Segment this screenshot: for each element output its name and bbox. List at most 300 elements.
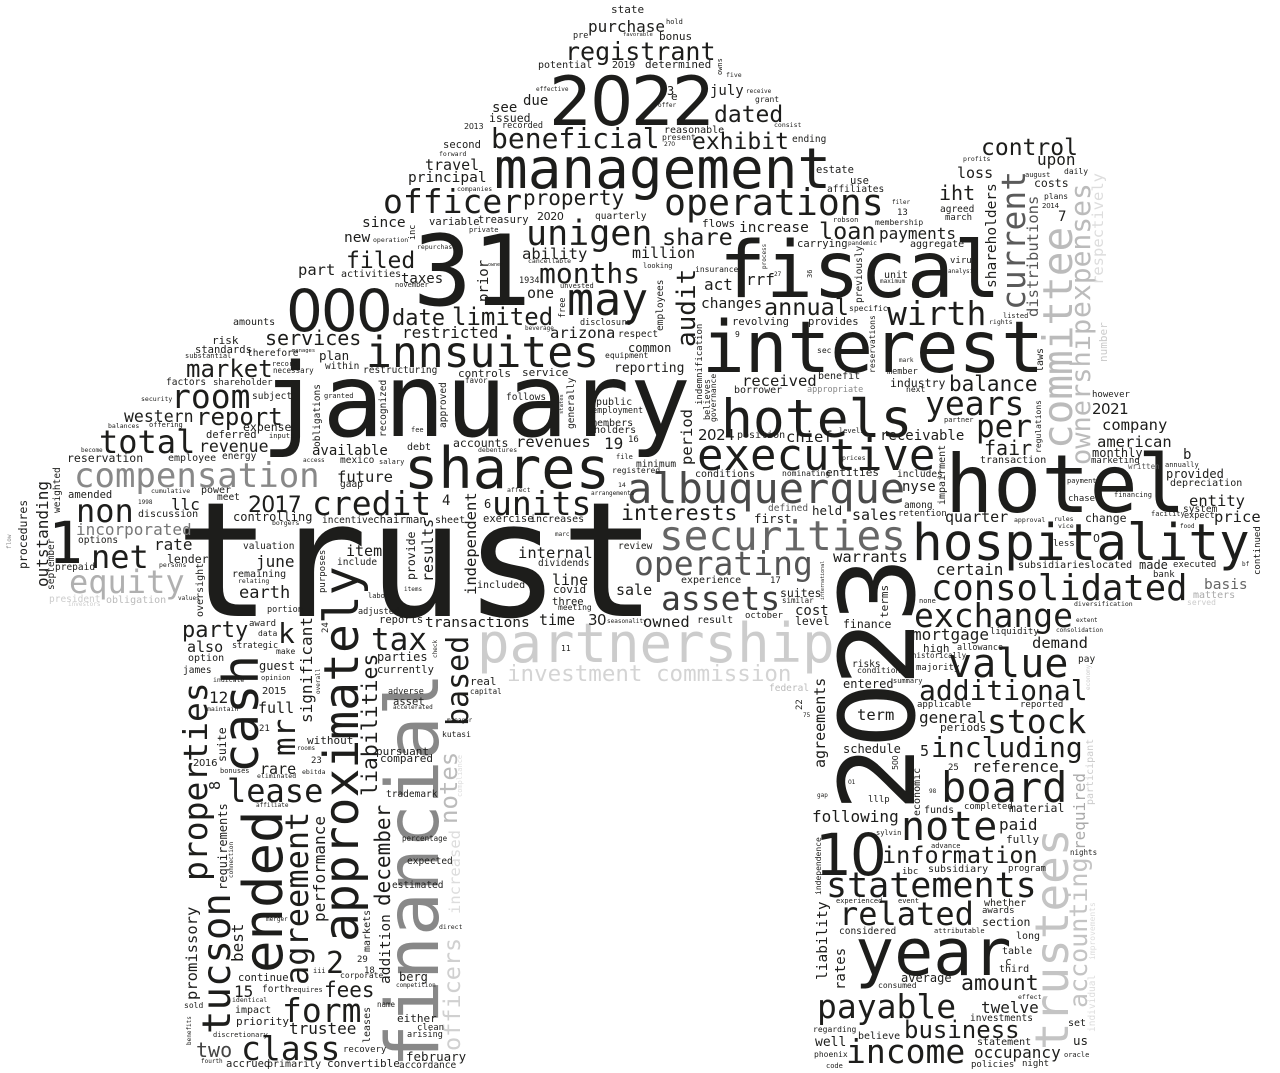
small horizontal words: access (303, 457, 325, 464)
vertical words: increased (446, 830, 464, 914)
small horizontal words: payment (1067, 477, 1097, 485)
medium horizontal words: 2021 (1092, 400, 1128, 418)
medium horizontal words: see (492, 100, 517, 116)
medium horizontal words: rate (154, 535, 193, 554)
small horizontal words: listed (1003, 312, 1028, 320)
small horizontal words: members (591, 418, 633, 429)
vertical words: current (994, 171, 1033, 310)
small horizontal words: energy (222, 451, 257, 462)
small horizontal words: expected (407, 856, 453, 867)
small horizontal words: table (1002, 946, 1032, 957)
small horizontal words: options (78, 535, 118, 546)
small horizontal words: respect (618, 329, 658, 340)
vertical words: suite (215, 727, 229, 762)
small horizontal words: dividends (538, 558, 589, 569)
small horizontal words: marc (555, 531, 570, 538)
vertical words: oversight (195, 563, 206, 617)
small horizontal words: employee (168, 453, 216, 464)
medium horizontal words: tax (371, 622, 427, 658)
small horizontal words: manager (447, 717, 473, 724)
small horizontal words: 01 (848, 779, 856, 786)
vertical words: check (432, 640, 439, 658)
medium horizontal words: total (99, 423, 195, 461)
small horizontal words: currently (377, 664, 434, 676)
medium horizontal words: owned (643, 613, 690, 631)
medium horizontal words: item (346, 542, 382, 560)
small horizontal words: fourth (201, 1058, 223, 1065)
largest words: financial (371, 672, 456, 1068)
small horizontal words: food (1180, 523, 1195, 530)
small horizontal words: favor (465, 376, 488, 385)
small horizontal words: debt (407, 442, 431, 453)
small horizontal words: state (611, 3, 644, 16)
small horizontal words: owner (488, 262, 503, 268)
medium horizontal words: sale (616, 581, 652, 599)
small horizontal words: defined (768, 503, 808, 514)
small horizontal words: quarterly (595, 211, 647, 222)
vertical words: impairment (937, 445, 948, 505)
medium horizontal words: travel (425, 156, 479, 174)
small horizontal words: employment (592, 406, 643, 416)
small horizontal words: ebitda (302, 768, 326, 776)
small horizontal words: holders (594, 425, 636, 436)
medium horizontal words: balance (949, 372, 1038, 396)
medium horizontal words: act (704, 275, 733, 294)
small horizontal words: diversification (1074, 600, 1133, 608)
vertical words: liabilities (358, 654, 383, 796)
small horizontal words: result (697, 615, 733, 626)
small horizontal words: made (1139, 558, 1168, 572)
small horizontal words: cumulative (151, 487, 190, 495)
small horizontal words: issued (489, 111, 531, 125)
small horizontal words: offer (658, 102, 676, 109)
small horizontal words: data (258, 629, 277, 638)
small horizontal words: treasury (478, 214, 529, 226)
small horizontal words: 11 (561, 644, 571, 653)
small horizontal words: attributable (934, 927, 985, 935)
small horizontal words: labor (368, 592, 389, 600)
medium horizontal words: arizona (550, 324, 615, 342)
small horizontal words: estate (816, 164, 854, 176)
medium horizontal words: services (265, 326, 361, 350)
small horizontal words: relating (238, 577, 269, 585)
small horizontal words: 2013 (464, 122, 483, 131)
small horizontal words: corporate (340, 971, 384, 980)
small horizontal words: carrying (797, 238, 848, 250)
small horizontal words: none (919, 597, 936, 605)
small horizontal words: bonuses (220, 767, 250, 775)
medium horizontal words: fees (324, 978, 375, 1002)
vertical words: recognized (378, 380, 389, 437)
small horizontal words: incentive (322, 515, 374, 526)
small horizontal words: kutasi (442, 730, 471, 739)
small horizontal words: meeting (558, 603, 592, 612)
medium horizontal words: assets (661, 579, 780, 618)
medium horizontal words: western (124, 407, 194, 426)
small horizontal words: three (552, 596, 584, 608)
medium horizontal words: loss (957, 164, 993, 182)
small horizontal words: prices (842, 454, 866, 462)
small horizontal words: asset (393, 696, 425, 708)
medium horizontal words: per (976, 409, 1032, 445)
small horizontal words: unit (884, 270, 908, 281)
small horizontal words: historically (912, 651, 967, 660)
small horizontal words: section (982, 915, 1030, 929)
small horizontal words: system (1183, 504, 1218, 515)
small horizontal words: benefit (818, 371, 860, 382)
medium horizontal words: paid (999, 815, 1038, 834)
small horizontal words: equipment (605, 351, 649, 360)
small horizontal words: five (726, 71, 742, 79)
small horizontal words: statement (977, 1037, 1031, 1048)
small horizontal words: investments (970, 1013, 1033, 1024)
small horizontal words: allowance (957, 643, 1003, 653)
vertical words: improvements (1088, 902, 1097, 960)
medium horizontal words: securities (659, 512, 906, 560)
largest words: trust (175, 467, 657, 654)
small horizontal words: costs (1034, 176, 1069, 190)
small horizontal words: james (183, 665, 212, 676)
small horizontal words: debentures (478, 446, 517, 454)
small horizontal words: periods (940, 721, 986, 734)
medium horizontal words: related (839, 895, 974, 933)
small horizontal words: portion (267, 605, 303, 615)
vertical words: individual (1087, 975, 1098, 1032)
small horizontal words: persons (159, 561, 186, 569)
vertical words: rates (833, 948, 849, 990)
vertical words: laws (1035, 348, 1046, 372)
vertical words: free (558, 298, 568, 318)
vertical words: period (678, 409, 696, 465)
small horizontal words: obligation (106, 595, 166, 606)
small horizontal words: third (999, 964, 1029, 975)
small horizontal words: sheet (435, 515, 465, 526)
small horizontal words: valuation (243, 541, 294, 552)
small horizontal words: material (1009, 801, 1064, 815)
small horizontal words: extent (1076, 617, 1098, 624)
small horizontal words: applicable (917, 700, 971, 710)
small horizontal words: e (671, 90, 678, 103)
small horizontal words: however (1092, 390, 1131, 400)
small horizontal words: considered (839, 926, 896, 937)
small horizontal words: continue (238, 972, 289, 984)
small horizontal words: affect (507, 486, 531, 494)
small horizontal words: adjusted (358, 607, 399, 617)
vertical words: officers (438, 938, 466, 1051)
small horizontal words: recovery (343, 1045, 387, 1055)
small horizontal words: insurance (695, 265, 739, 274)
medium horizontal words: receivable (880, 428, 964, 444)
vertical words: provide (404, 531, 418, 580)
small horizontal words: sold (184, 1001, 203, 1010)
small horizontal words: whether (984, 898, 1026, 909)
medium horizontal words: months (539, 257, 640, 290)
small horizontal words: approval (1014, 516, 1045, 524)
small horizontal words: iii (313, 967, 326, 975)
small horizontal words: disclosure (580, 318, 631, 328)
small horizontal words: opinion (261, 674, 291, 682)
medium horizontal words: fair (984, 436, 1032, 460)
medium horizontal words: shares (404, 436, 610, 502)
small horizontal words: position (737, 430, 785, 441)
medium horizontal words: units (492, 484, 591, 523)
medium horizontal words: june (256, 552, 295, 571)
medium horizontal words: part (298, 261, 335, 279)
small horizontal words: risks (852, 659, 881, 670)
small horizontal words: second (443, 139, 481, 151)
small horizontal words: finance (843, 617, 892, 631)
largest words: january (261, 342, 691, 461)
medium horizontal words: statements (826, 866, 1037, 906)
vertical words: 8 (206, 781, 224, 790)
vertical words: obligations (312, 384, 323, 447)
small horizontal words: located (1090, 560, 1132, 571)
small horizontal words: option (188, 653, 224, 664)
small horizontal words: meet (217, 492, 240, 503)
medium horizontal words: exhibit (692, 129, 789, 155)
small horizontal words: beverage (525, 325, 554, 332)
small horizontal words: mark (899, 357, 914, 364)
medium horizontal words: revenues (516, 433, 591, 451)
small horizontal words: october (745, 611, 784, 621)
small horizontal words: accelerated (393, 704, 433, 711)
small horizontal words: real (470, 675, 496, 688)
small horizontal words: use (850, 175, 869, 187)
small horizontal words: file (616, 453, 633, 461)
small horizontal words: therefore (247, 348, 299, 359)
medium horizontal words: received (742, 372, 817, 390)
vertical words: 500 (891, 755, 900, 770)
medium horizontal words: annual (764, 293, 849, 321)
small horizontal words: 13 (897, 208, 908, 218)
small horizontal words: 17 (770, 576, 781, 586)
small horizontal words: summary (893, 677, 923, 685)
vertical words: overall (315, 668, 322, 694)
small horizontal words: security (141, 395, 172, 403)
small horizontal words: discussion (138, 509, 198, 520)
small horizontal words: november (395, 281, 429, 289)
small horizontal words: potential (538, 60, 592, 71)
medium horizontal words: line (552, 571, 588, 589)
medium horizontal words: non (76, 492, 134, 530)
medium horizontal words: 2017 (248, 493, 301, 518)
medium horizontal words: credit (312, 484, 431, 523)
small horizontal words: believe (858, 1031, 900, 1042)
small horizontal words: analysis (948, 268, 977, 275)
small horizontal words: either (397, 1012, 437, 1025)
vertical words: addition (378, 914, 394, 984)
small horizontal words: level (795, 614, 830, 628)
medium horizontal words: 2024 (698, 426, 734, 444)
vertical words: 36 (806, 270, 814, 278)
medium horizontal words: available (312, 443, 388, 459)
small horizontal words: set (1068, 1018, 1086, 1029)
small horizontal words: program (1008, 864, 1046, 874)
small horizontal words: robson (833, 216, 858, 224)
medium horizontal words: payments (879, 224, 956, 243)
small horizontal words: pre (573, 31, 588, 41)
small horizontal words: balances (108, 422, 139, 430)
medium horizontal words: value (948, 641, 1068, 687)
small horizontal words: necessary (273, 366, 314, 375)
small horizontal words: b (1183, 447, 1191, 463)
medium horizontal words: hotels (721, 389, 912, 450)
medium horizontal words: also (187, 638, 223, 656)
small horizontal words: record (272, 360, 297, 368)
small horizontal words: pay (1078, 654, 1095, 665)
small horizontal words: bank (1153, 570, 1175, 580)
small horizontal words: items (404, 586, 422, 593)
vertical words: required (1070, 773, 1089, 850)
vertical words: terms (878, 585, 891, 618)
small horizontal words: 2015 (262, 686, 286, 697)
small horizontal words: subject (252, 391, 292, 402)
medium horizontal words: operations (664, 181, 884, 224)
small horizontal words: companies (457, 185, 492, 193)
medium horizontal words: iht (939, 181, 975, 205)
small horizontal words: vice (1058, 522, 1074, 530)
medium horizontal words: trustee (289, 1019, 356, 1038)
medium horizontal words: business (904, 1016, 1020, 1044)
vertical words: respectively (1089, 173, 1107, 285)
small horizontal words: adverse (388, 687, 424, 697)
small horizontal words: agreed (940, 204, 974, 215)
vertical words: outstanding (33, 481, 52, 587)
small horizontal words: rooms (297, 745, 315, 752)
small horizontal words: forth (262, 984, 291, 995)
small horizontal words: chase (1068, 494, 1095, 504)
vertical words: 24 (321, 622, 331, 633)
small horizontal words: expense (243, 420, 292, 434)
small horizontal words: levels (839, 427, 864, 435)
small horizontal words: president (49, 594, 100, 605)
vertical words: expenses (1064, 183, 1097, 318)
small horizontal words: seasonality (607, 618, 647, 625)
medium horizontal words: transactions (425, 615, 530, 631)
small horizontal words: gaap (340, 479, 363, 490)
medium horizontal words: time (539, 611, 575, 629)
vertical words: agreements (811, 678, 829, 768)
small horizontal words: expect (1184, 511, 1215, 521)
small horizontal words: 2016 (193, 758, 217, 769)
small horizontal words: 3 (667, 84, 674, 98)
small horizontal words: manages (292, 348, 315, 354)
vertical words: promissory (183, 907, 201, 1000)
vertical words: agreement (278, 812, 316, 985)
small horizontal words: make (276, 647, 295, 656)
small horizontal words: average (901, 971, 952, 985)
medium horizontal words: full (258, 699, 294, 717)
small horizontal words: salary (379, 458, 404, 466)
medium horizontal words: sales (852, 506, 897, 524)
small horizontal words: majority (916, 663, 960, 673)
medium horizontal words: quarter (945, 508, 1008, 526)
vertical words: audit (672, 269, 702, 347)
largest words: committee (1034, 227, 1082, 449)
small horizontal words: 0 (1093, 532, 1100, 545)
medium horizontal words: investment commission (507, 661, 791, 687)
small horizontal words: 7 (1058, 209, 1066, 225)
largest words: 31 (413, 215, 531, 329)
small horizontal words: trademark (386, 789, 438, 800)
small horizontal words: fully (1006, 833, 1039, 846)
small horizontal words: high (923, 642, 950, 655)
small horizontal words: fee (411, 426, 424, 434)
small horizontal words: filer (892, 199, 910, 206)
medium horizontal words: cost (795, 603, 829, 619)
medium horizontal words: company (1102, 416, 1167, 434)
small horizontal words: service (522, 366, 568, 379)
small horizontal words: accordance (399, 1060, 456, 1071)
medium horizontal words: filed (346, 248, 415, 274)
small horizontal words: 98 (929, 788, 937, 795)
small horizontal words: recorded (502, 121, 543, 131)
medium horizontal words: two (196, 1038, 232, 1062)
medium horizontal words: general (919, 708, 986, 727)
small horizontal words: discretionary (213, 1031, 268, 1039)
medium horizontal words: interests (621, 501, 738, 526)
largest words: approximately (314, 566, 370, 942)
medium horizontal words: 15 (234, 982, 253, 1001)
small horizontal words: plan (319, 348, 349, 363)
largest words: hotel (945, 438, 1186, 531)
medium horizontal words: equity (69, 563, 185, 601)
small horizontal words: include (337, 557, 377, 568)
small horizontal words: 1934 (519, 276, 539, 286)
medium horizontal words: party (182, 618, 248, 643)
small horizontal words: aggregate (910, 239, 964, 250)
small horizontal words: completed (964, 802, 1013, 812)
small horizontal words: held (812, 503, 842, 518)
medium horizontal words: occupancy (974, 1043, 1061, 1062)
vertical words: liability (815, 901, 831, 980)
small horizontal words: plans (1044, 192, 1068, 201)
small horizontal words: depreciation (1170, 478, 1242, 489)
small horizontal words: review (618, 541, 653, 552)
small horizontal words: identical (232, 996, 267, 1004)
small horizontal words: consumed (878, 981, 917, 990)
medium horizontal words: increase (739, 220, 809, 236)
largest words: partnership (477, 612, 835, 675)
small horizontal words: 2020 (537, 210, 564, 223)
small horizontal words: financing (1114, 491, 1152, 499)
vertical words: process (761, 243, 768, 269)
small horizontal words: retention (898, 509, 947, 519)
small horizontal words: 23 (311, 756, 322, 766)
small horizontal words: code (826, 1062, 843, 1070)
small horizontal words: subsidiary (928, 864, 988, 875)
small horizontal words: become (81, 447, 103, 454)
medium horizontal words: one (527, 284, 554, 302)
medium horizontal words: following (812, 807, 899, 826)
medium horizontal words: class (241, 1029, 340, 1068)
small horizontal words: ibc (902, 867, 918, 877)
medium horizontal words: llc (171, 495, 200, 514)
medium horizontal words: k (278, 617, 295, 650)
small horizontal words: facility (1151, 510, 1185, 518)
medium horizontal words: term (857, 706, 894, 724)
small horizontal words: 6 (484, 497, 491, 511)
vertical words: september (46, 538, 57, 590)
medium horizontal words: entity (1189, 492, 1245, 510)
small horizontal words: capital (470, 687, 502, 696)
small horizontal words: reporting (614, 361, 684, 376)
small horizontal words: advance (931, 842, 961, 850)
small horizontal words: ending (792, 134, 826, 145)
medium horizontal words: information (882, 841, 1038, 869)
medium horizontal words: income (846, 1032, 965, 1071)
small horizontal words: primarily (267, 1059, 321, 1070)
